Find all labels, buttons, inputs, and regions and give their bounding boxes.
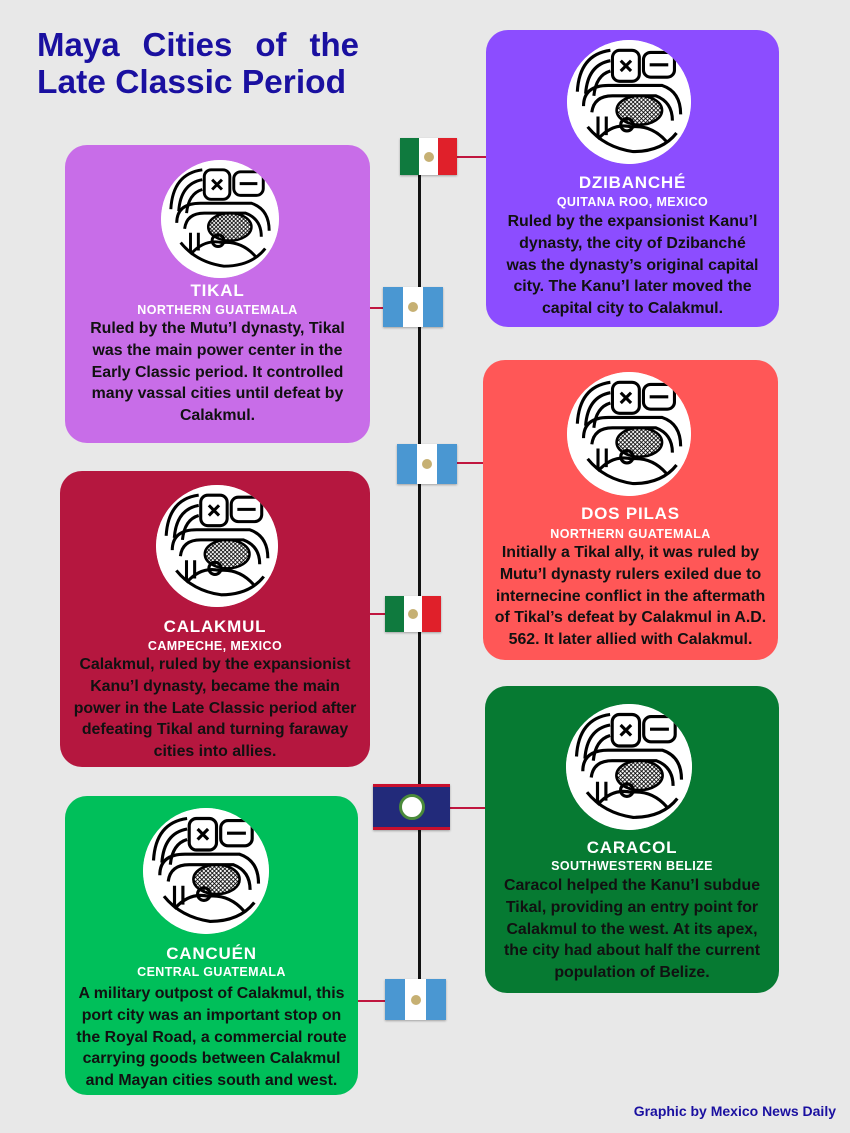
text: dynasty, the city of Dzibanché <box>519 235 746 252</box>
text <box>90 320 345 424</box>
icon: glyph <box>566 704 692 830</box>
title: Maya Cities of the <box>37 26 359 63</box>
text: cities into allies. <box>154 743 276 760</box>
text <box>506 213 758 317</box>
text <box>504 877 760 981</box>
heading: TIKAL <box>190 281 245 300</box>
text: of Tikal’s defeat by Calakmul in A.D. <box>495 609 766 626</box>
text: Mutu’l dynasty rulers exiled due to <box>500 566 761 583</box>
card: Cancuén <box>65 796 358 1095</box>
text: the Royal Road, a commercial route <box>76 1029 347 1046</box>
text: A military outpost of Calakmul, this <box>78 985 345 1002</box>
credit: Graphic by Mexico News Daily <box>634 1103 836 1119</box>
text: Tikal, providing an entry point for <box>506 899 758 916</box>
text: port city was an important stop on <box>82 1007 341 1024</box>
text: Ruled by the expansionist Kanu’l <box>508 213 757 230</box>
heading: CANCUÉN <box>166 944 257 963</box>
subheading: SOUTHWESTERN BELIZE <box>551 859 713 873</box>
icon: glyph <box>143 808 269 934</box>
text: Calakmul. <box>180 407 255 424</box>
card: Dzibanché <box>486 30 779 327</box>
subheading: QUITANA ROO, MEXICO <box>557 195 708 209</box>
text: population of Belize. <box>554 964 710 981</box>
heading: CARACOL <box>587 838 677 857</box>
text <box>74 656 356 760</box>
heading: DZIBANCHÉ <box>579 173 686 192</box>
icon: glyph <box>567 40 691 164</box>
card: Tikal <box>65 145 370 443</box>
text: many vassal cities until defeat by <box>92 385 343 402</box>
text: city. The Kanu’l later moved the <box>513 278 752 295</box>
text: Caracol helped the Kanu’l subdue <box>504 877 760 894</box>
icon: glyph <box>156 485 278 607</box>
card: Caracol <box>485 686 779 993</box>
heading: CALAKMUL <box>164 617 266 636</box>
flag: Belize <box>373 784 450 830</box>
text: Initially a Tikal ally, it was ruled by <box>502 544 759 561</box>
subheading: CENTRAL GUATEMALA <box>137 965 286 979</box>
icon: glyph <box>161 160 279 278</box>
flag: Guatemala <box>383 287 443 327</box>
text <box>76 985 347 1089</box>
text: Ruled by the Mutu’l dynasty, Tikal <box>90 320 345 337</box>
text: the city had about half the current <box>504 942 760 959</box>
text: Calakmul, ruled by the expansionist <box>79 656 351 673</box>
subheading: NORTHERN GUATEMALA <box>137 303 298 317</box>
card: Dos Pilas <box>483 360 778 660</box>
text: was the main power center in the <box>93 342 342 359</box>
text: internecine conflict in the aftermath <box>496 588 765 605</box>
text: Calakmul to the west. At its apex, <box>506 921 758 938</box>
text: and Mayan cities south and west. <box>86 1072 337 1089</box>
card: Calakmul <box>60 471 370 767</box>
timeline line <box>418 160 421 1000</box>
subheading: CAMPECHE, MEXICO <box>148 639 282 653</box>
text <box>495 544 766 648</box>
text: 562. It later allied with Calakmul. <box>509 631 752 648</box>
heading: DOS PILAS <box>581 504 680 523</box>
connectors <box>455 156 487 158</box>
text: Early Classic period. It controlled <box>92 364 343 381</box>
text: defeating Tikal and turning faraway <box>82 721 348 738</box>
flag: Mexico <box>385 596 441 632</box>
text: power in the Late Classic period after <box>74 700 356 717</box>
text: carrying goods between Calakmul <box>83 1050 340 1067</box>
flag: Guatemala <box>385 979 446 1020</box>
title: Late Classic Period <box>37 64 346 101</box>
icon: glyph <box>567 372 691 496</box>
text: capital city to Calakmul. <box>542 300 723 317</box>
text: was the dynasty’s original capital <box>506 257 758 274</box>
flag: Guatemala <box>397 444 457 484</box>
flag: Mexico <box>400 138 457 175</box>
text: Kanu’l dynasty, became the main <box>90 678 340 695</box>
subheading: NORTHERN GUATEMALA <box>550 527 711 541</box>
title <box>37 26 359 101</box>
